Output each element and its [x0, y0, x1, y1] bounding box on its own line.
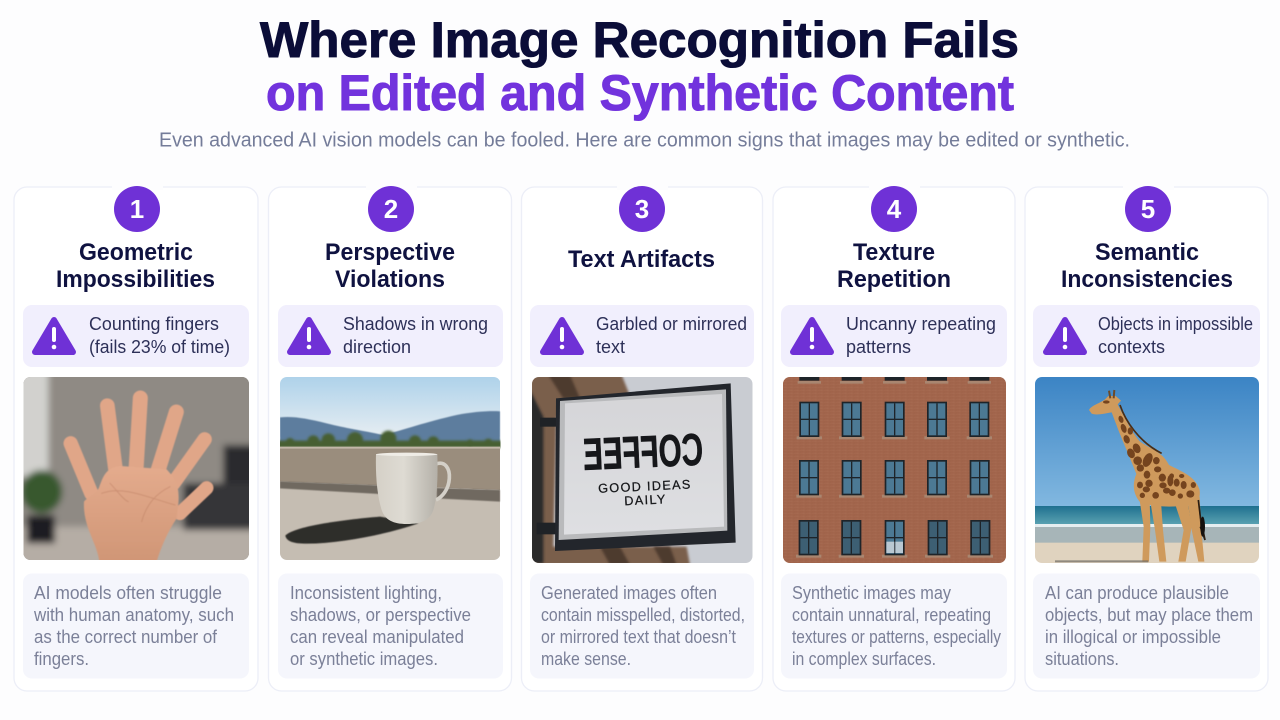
heading: Impossibilities	[56, 266, 215, 293]
heading: Violations	[335, 266, 445, 293]
panel: semantic inconsistencies	[1025, 184, 1268, 691]
description: contain misspelled, distorted,	[541, 605, 745, 625]
number badge 3	[619, 186, 665, 232]
description: situations.	[1045, 649, 1119, 669]
number badge 4	[871, 186, 917, 232]
description	[530, 574, 754, 678]
warning callout: (fails 23% of time)	[89, 337, 230, 357]
photo: brick facade with repeating windows	[782, 375, 1008, 565]
description	[1033, 574, 1260, 678]
description: as the correct number of	[34, 627, 218, 647]
warning callout	[278, 305, 503, 367]
title	[260, 12, 1019, 121]
description: shadows, or perspective	[290, 605, 471, 625]
photo: open hand with six fingers	[24, 377, 249, 560]
description: with human anatomy, such	[33, 605, 234, 625]
description: contain unnatural, repeating	[792, 605, 991, 625]
photo: hanging sign with mirrored lettering: COFFEE	[582, 424, 704, 480]
heading: Text Artifacts	[568, 246, 715, 273]
subtitle: Even advanced AI vision models can be fooled. Here are common signs that images may be edited or synthetic.	[159, 130, 1130, 152]
heading: Texture	[853, 239, 935, 266]
description: AI can produce plausible	[1045, 583, 1229, 603]
number badge 5: 5	[1141, 194, 1155, 224]
title: on Edited and Synthetic Content	[266, 65, 1014, 121]
description: or synthetic images.	[290, 649, 438, 669]
warning callout: Uncanny repeating	[846, 314, 996, 334]
description: textures or patterns, especially	[792, 627, 1001, 647]
heading: Repetition	[837, 266, 951, 293]
photo: mug with a misplaced shadow	[277, 377, 503, 570]
photo: hanging sign with mirrored lettering	[530, 375, 755, 565]
warning callout: Counting fingers	[89, 314, 219, 334]
heading: Semantic	[1095, 239, 1199, 266]
heading: Perspective	[325, 239, 455, 266]
warning callout	[781, 305, 1007, 367]
warning callout	[1033, 305, 1260, 367]
warning callout	[23, 305, 249, 367]
warning callout: Objects in impossible	[1098, 314, 1253, 334]
number badge 1: 1	[130, 194, 144, 224]
description	[781, 574, 1007, 678]
title: Where Image Recognition Fails	[260, 12, 1019, 68]
number badge 2: 2	[384, 194, 398, 224]
panel: perspective violations	[268, 184, 512, 691]
warning callout: patterns	[846, 337, 911, 357]
warning callout: Shadows in wrong	[343, 314, 488, 334]
heading: Inconsistencies	[1061, 266, 1233, 293]
heading	[56, 239, 215, 293]
panel: geometric impossibilities	[0, 184, 267, 691]
warning callout: Garbled or mirrored	[596, 314, 747, 334]
description: in illogical or impossible	[1045, 627, 1221, 647]
warning callout	[530, 305, 754, 367]
number badge 2	[368, 186, 414, 232]
heading: Geometric	[79, 239, 193, 266]
heading	[837, 239, 951, 293]
number badge 4: 4	[887, 194, 902, 224]
warning callout: text	[596, 337, 625, 357]
description	[23, 574, 249, 678]
description: can reveal manipulated	[290, 627, 464, 647]
description: fingers.	[34, 649, 89, 669]
number badge 1	[114, 186, 160, 232]
description: in complex surfaces.	[792, 649, 936, 669]
panel: texture repetition	[773, 184, 1015, 691]
photo: hanging sign with mirrored lettering: GOOD IDEAS	[598, 478, 692, 496]
warning callout: contexts	[1098, 337, 1165, 357]
description: or mirrored text that doesn’t	[541, 627, 736, 647]
description: Inconsistent lighting,	[290, 583, 442, 603]
photo: giraffe on a beach	[1033, 375, 1260, 564]
heading	[325, 239, 455, 293]
description: Generated images often	[541, 583, 717, 603]
description: make sense.	[541, 649, 631, 669]
panel: text artifacts	[522, 184, 762, 691]
description: Synthetic images may	[792, 583, 951, 603]
number badge 3: 3	[635, 194, 649, 224]
photo: hanging sign with mirrored lettering: DAILY	[624, 492, 667, 508]
description: AI models often struggle	[34, 583, 222, 603]
heading	[1061, 239, 1233, 293]
number badge 5	[1125, 186, 1171, 232]
description	[278, 574, 503, 678]
warning callout: direction	[343, 337, 411, 357]
description: objects, but may place them	[1045, 605, 1253, 625]
